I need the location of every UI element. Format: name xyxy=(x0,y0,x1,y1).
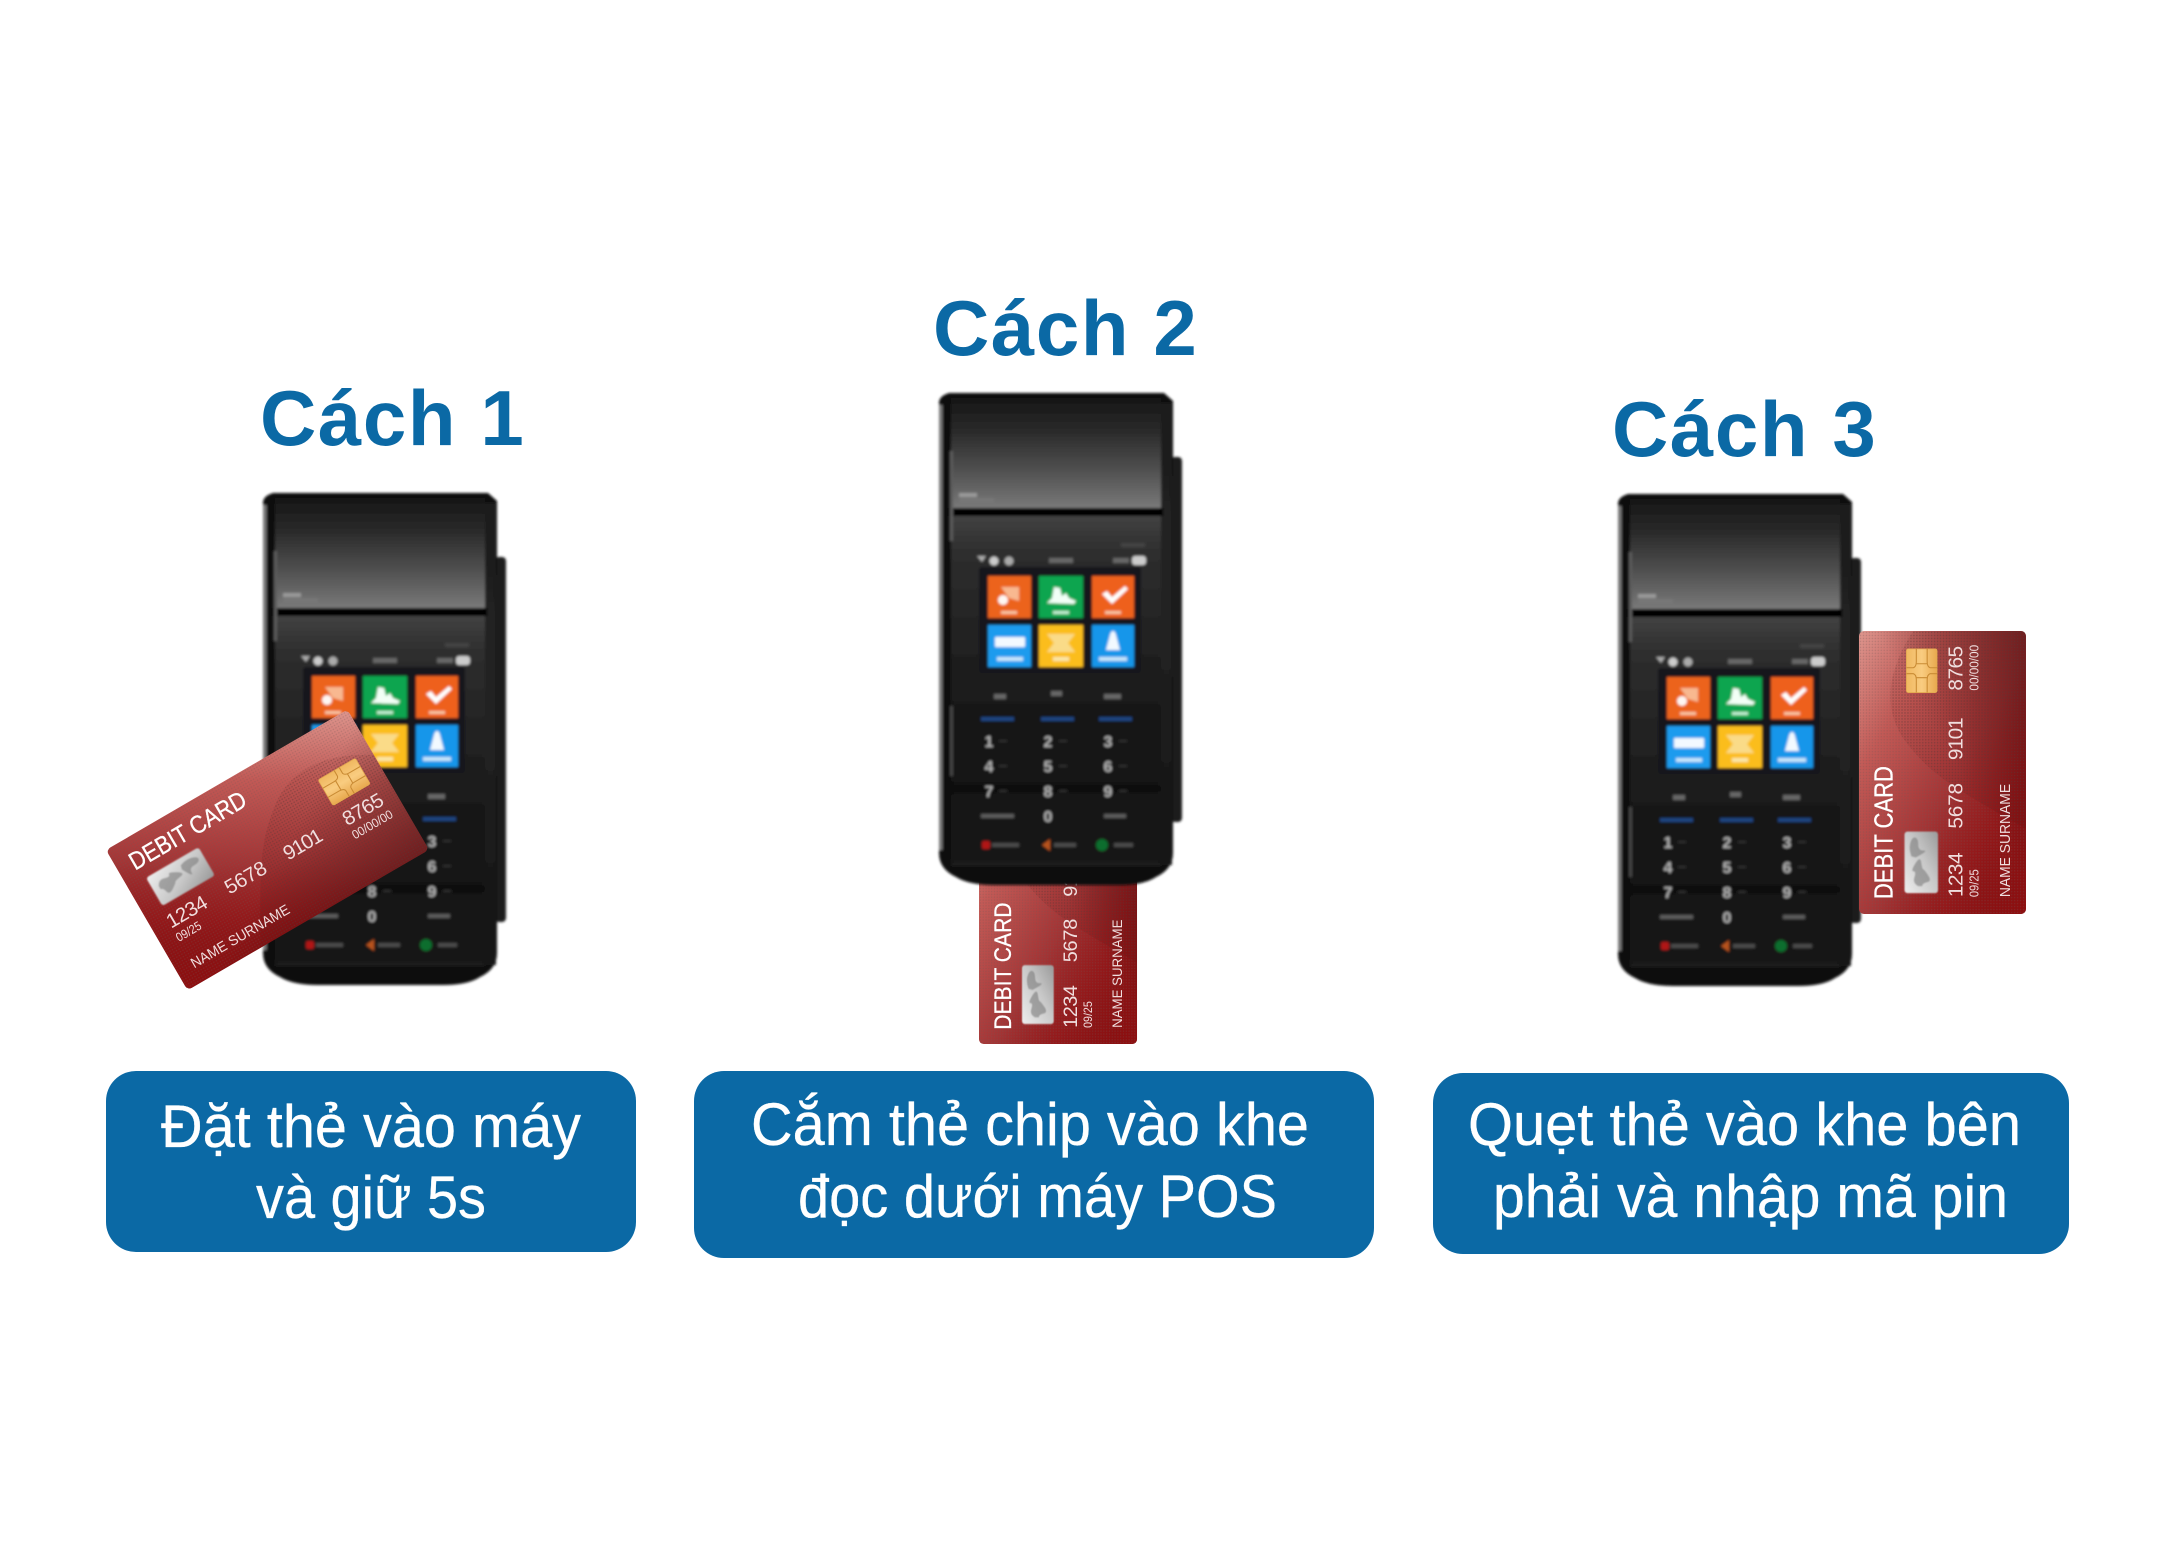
POS terminal 1: 4 xyxy=(309,859,318,876)
POS terminal 2: 2 xyxy=(1044,734,1053,751)
POS terminal 1: 6 xyxy=(428,859,437,876)
credit card inserted in bottom slot: 8765 xyxy=(1060,788,1082,830)
POS terminal 2 xyxy=(939,393,1182,885)
credit card inserted in bottom slot: 1234 xyxy=(1060,985,1082,1028)
credit card inserted in bottom slot: 9101 xyxy=(1060,856,1082,897)
POS terminal 1: 0 xyxy=(368,909,377,926)
POS terminal 2: 4 xyxy=(985,759,994,776)
POS terminal 3: 8 xyxy=(1723,885,1732,902)
credit card held over the terminal: 8765 xyxy=(339,789,388,830)
POS terminal 1: 9 xyxy=(428,884,437,901)
caption button 2: Cắm thẻ chip vào khe xyxy=(751,1091,1309,1158)
caption button 3: Quẹt thẻ vào khe bên xyxy=(1468,1091,2021,1158)
caption button 1: Đặt thẻ vào máy xyxy=(161,1093,581,1160)
credit card held over the terminal: 9101 xyxy=(280,825,327,865)
credit card swiped at right side: 1234 xyxy=(1945,852,1968,897)
POS terminal 2: 7 xyxy=(985,784,994,801)
POS terminal 2: 1 xyxy=(985,734,994,751)
credit card swiped at right side: 8765 xyxy=(1945,646,1968,691)
credit card held over the terminal xyxy=(106,710,429,990)
POS terminal 3: 2 xyxy=(1723,835,1732,852)
credit card inserted in bottom slot: 5678 xyxy=(1060,919,1082,962)
credit card swiped at right side xyxy=(1859,631,2026,914)
POS terminal 3 xyxy=(1618,494,1861,986)
POS terminal 3: 3 xyxy=(1783,835,1792,852)
credit card swiped at right side: DEBIT CARD xyxy=(1871,766,1899,899)
caption button 2: đọc dưới máy POS xyxy=(798,1163,1277,1230)
POS terminal 1: 3 xyxy=(428,834,437,851)
caption button 3 xyxy=(1433,1073,2069,1254)
credit card inserted in bottom slot: NAME SURNAME xyxy=(1109,920,1125,1028)
POS terminal 2: 5 xyxy=(1044,759,1053,776)
credit card held over the terminal: 5678 xyxy=(221,858,271,899)
caption button 1: và giữ 5s xyxy=(256,1164,486,1231)
POS terminal 2: 8 xyxy=(1044,784,1053,801)
panel: method 3 xyxy=(1433,385,2069,1254)
POS terminal 1: 7 xyxy=(309,884,318,901)
POS terminal 3: 7 xyxy=(1664,885,1673,902)
POS terminal 1: 2 xyxy=(368,834,377,851)
POS terminal 3: 5 xyxy=(1723,860,1732,877)
credit card swiped at right side: NAME SURNAME xyxy=(1998,784,2014,897)
POS terminal 2: 3 xyxy=(1104,734,1113,751)
POS terminal 3: 9 xyxy=(1783,885,1792,902)
POS terminal 3: 1 xyxy=(1664,835,1673,852)
credit card swiped at right side: 09/25 xyxy=(1967,869,1982,897)
credit card held over the terminal: 09/25 xyxy=(173,919,204,945)
POS terminal 1: 5 xyxy=(368,859,377,876)
POS terminal 2: 0 xyxy=(1044,809,1053,826)
credit card inserted in bottom slot: 09/25 xyxy=(1081,1001,1095,1028)
credit card held over the terminal: 1234 xyxy=(163,892,212,933)
POS terminal 3: 4 xyxy=(1664,860,1673,877)
POS terminal 2: 9 xyxy=(1104,784,1113,801)
caption button 1 xyxy=(106,1071,636,1252)
credit card inserted in bottom slot: DEBIT CARD xyxy=(990,902,1017,1030)
POS terminal 3: 0 xyxy=(1723,910,1732,927)
panel: method 2 xyxy=(694,284,1374,1258)
credit card held over the terminal: 00/00/00 xyxy=(350,807,395,842)
heading: Cách 2: Cách 2 xyxy=(933,284,1198,372)
caption button 3: phải và nhập mã pin xyxy=(1493,1163,2008,1230)
POS terminal 3: 6 xyxy=(1783,860,1792,877)
heading: Cách 3: Cách 3 xyxy=(1612,385,1877,473)
POS terminal 2: 6 xyxy=(1104,759,1113,776)
credit card swiped at right side: 5678 xyxy=(1945,783,1968,829)
caption button 2 xyxy=(694,1071,1374,1258)
credit card swiped at right side: 9101 xyxy=(1945,717,1968,760)
credit card swiped at right side: 00/00/00 xyxy=(1967,645,1982,691)
credit card inserted in bottom slot xyxy=(979,773,1137,1044)
POS terminal 1: 1 xyxy=(309,834,318,851)
heading: Cách 1: Cách 1 xyxy=(260,374,525,462)
POS terminal 1 xyxy=(263,493,506,985)
credit card held over the terminal: NAME SURNAME xyxy=(188,902,293,972)
credit card held over the terminal: DEBIT CARD xyxy=(124,786,252,876)
POS terminal 1: 8 xyxy=(368,884,377,901)
panel: method 1 xyxy=(106,374,636,1252)
